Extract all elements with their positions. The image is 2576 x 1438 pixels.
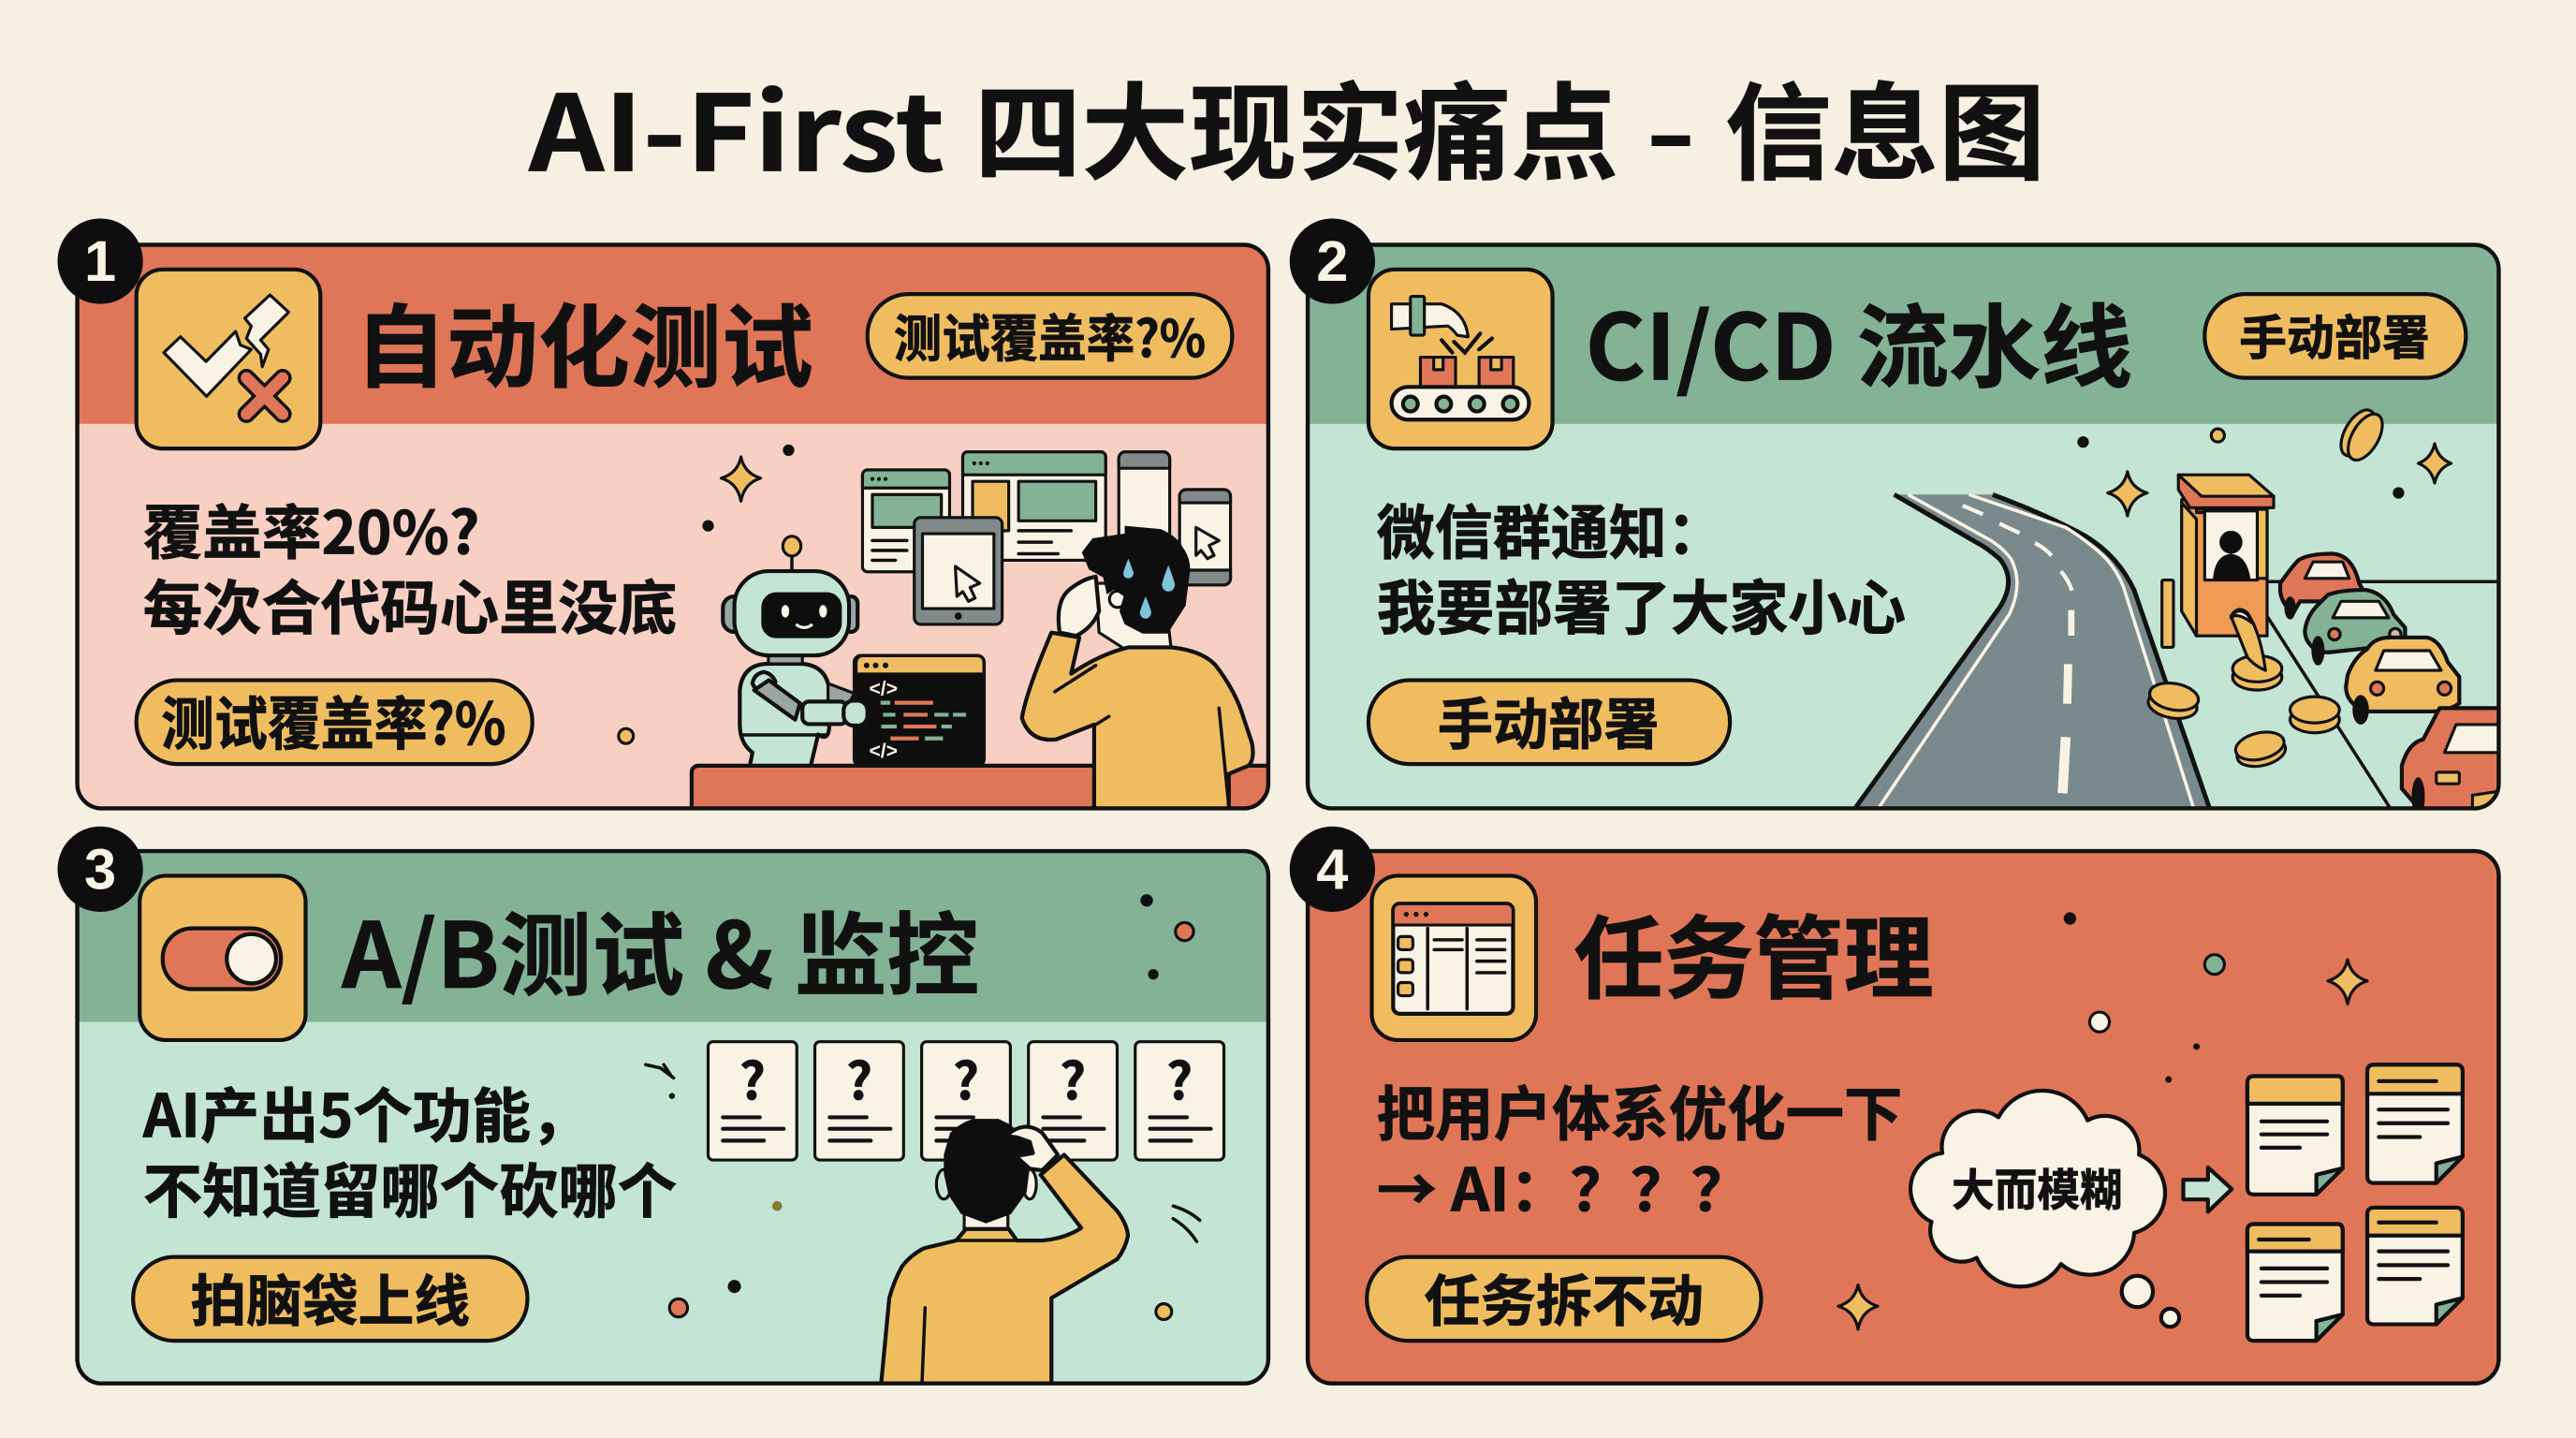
bottom pill bbox=[133, 1257, 527, 1341]
illustration: robot at code screen: </> bbox=[869, 678, 898, 699]
illustration: toll lines bbox=[2267, 581, 2497, 808]
illustration: robot at code screen: </> bbox=[869, 741, 898, 762]
panel heading: CI/CD 流水线 bbox=[1586, 274, 2132, 405]
illustration: five question cards: ? bbox=[846, 1040, 872, 1114]
illustration: coins and hand bbox=[2146, 609, 2339, 770]
illustration: desk bbox=[689, 764, 1266, 807]
illustration: road bbox=[1852, 494, 2211, 814]
illustration: robot at code screen bbox=[723, 536, 984, 769]
title: – bbox=[1647, 51, 1693, 202]
illustration: thought cloud: 大而模糊 bbox=[1952, 1154, 2123, 1219]
illustration: five question cards: ? bbox=[1060, 1040, 1086, 1114]
panel heading: 任务管理 bbox=[1573, 886, 1934, 1017]
badge 1 bbox=[57, 218, 143, 304]
badge 2: 2 bbox=[1316, 229, 1348, 294]
illustration: browser windows and devices bbox=[862, 452, 1231, 624]
panel: 自动化测试 bbox=[78, 244, 1283, 831]
illustration: sparkles, dots and flying coin bbox=[2077, 404, 2452, 516]
illustration: five question cards: ? bbox=[953, 1040, 979, 1114]
panel heading: A/B测试 & 监控 bbox=[341, 883, 979, 1014]
arrow bbox=[2183, 1167, 2232, 1211]
badge 1: 1 bbox=[84, 229, 116, 294]
body text: AI产出5个功能， bbox=[142, 1069, 590, 1154]
bottom pill bbox=[1368, 681, 1730, 764]
bottom pill: 任务拆不动 bbox=[1425, 1257, 1704, 1338]
title: 信息图 bbox=[1725, 51, 2045, 202]
illustration: thought cloud bbox=[1910, 1091, 2179, 1327]
title: 四大现实痛点 bbox=[974, 51, 1618, 202]
body text: 把用户体系优化一下 bbox=[1377, 1068, 1902, 1153]
illustration: worried person bbox=[1022, 526, 1253, 818]
illustration: queue of cars bbox=[2280, 553, 2505, 816]
badge 3 bbox=[57, 827, 143, 912]
tag pill bbox=[2204, 294, 2466, 378]
bottom pill: 拍脑袋上线 bbox=[191, 1257, 470, 1338]
tag pill: 手动部署 bbox=[2239, 300, 2430, 369]
header icon: pipeline conveyor bbox=[1368, 270, 1553, 448]
badge 2 bbox=[1290, 218, 1375, 304]
illustration: five question cards: ? bbox=[739, 1040, 766, 1114]
badge 3: 3 bbox=[84, 837, 116, 902]
body text: 不知道留哪个砍哪个 bbox=[143, 1145, 677, 1230]
panel: 任务管理 bbox=[1308, 851, 2498, 1384]
badge 4 bbox=[1290, 827, 1375, 912]
tag pill: 测试覆盖率?% bbox=[894, 298, 1206, 372]
panel heading: 自动化测试 bbox=[355, 274, 813, 405]
illustration: toll booth bbox=[2162, 475, 2274, 647]
body text: → AI：？？？ bbox=[1377, 1143, 1751, 1228]
illustration: four notes bbox=[2247, 1064, 2463, 1341]
illustration: decorative sparkles and dots bbox=[1838, 912, 2367, 1329]
header icon: toggle switch bbox=[139, 875, 305, 1040]
illustration: sparkle and dots bbox=[619, 445, 795, 743]
badge 4: 4 bbox=[1316, 837, 1348, 902]
body text: 覆盖率20%? bbox=[143, 486, 480, 571]
body text: 微信群通知： bbox=[1377, 486, 1725, 571]
body text: 每次合代码心里没底 bbox=[143, 562, 677, 647]
bottom pill: 手动部署 bbox=[1438, 681, 1660, 761]
illustration: five question cards bbox=[708, 1040, 1224, 1160]
bottom pill bbox=[1367, 1257, 1761, 1341]
title: AI-First bbox=[528, 51, 944, 202]
bottom pill: 测试覆盖率?% bbox=[161, 678, 506, 761]
header icon: task board bbox=[1372, 875, 1536, 1040]
illustration: decorative dots bbox=[646, 894, 1200, 1319]
panel: CI/CD 流水线 bbox=[1308, 244, 2505, 816]
body text: 我要部署了大家小心 bbox=[1377, 562, 1906, 647]
header icon: broken checkmark bbox=[137, 270, 320, 448]
panel: A/B测试 & 监控 bbox=[78, 851, 1268, 1397]
illustration: five question cards: ? bbox=[1166, 1040, 1193, 1114]
illustration: confused person bbox=[880, 1119, 1128, 1397]
